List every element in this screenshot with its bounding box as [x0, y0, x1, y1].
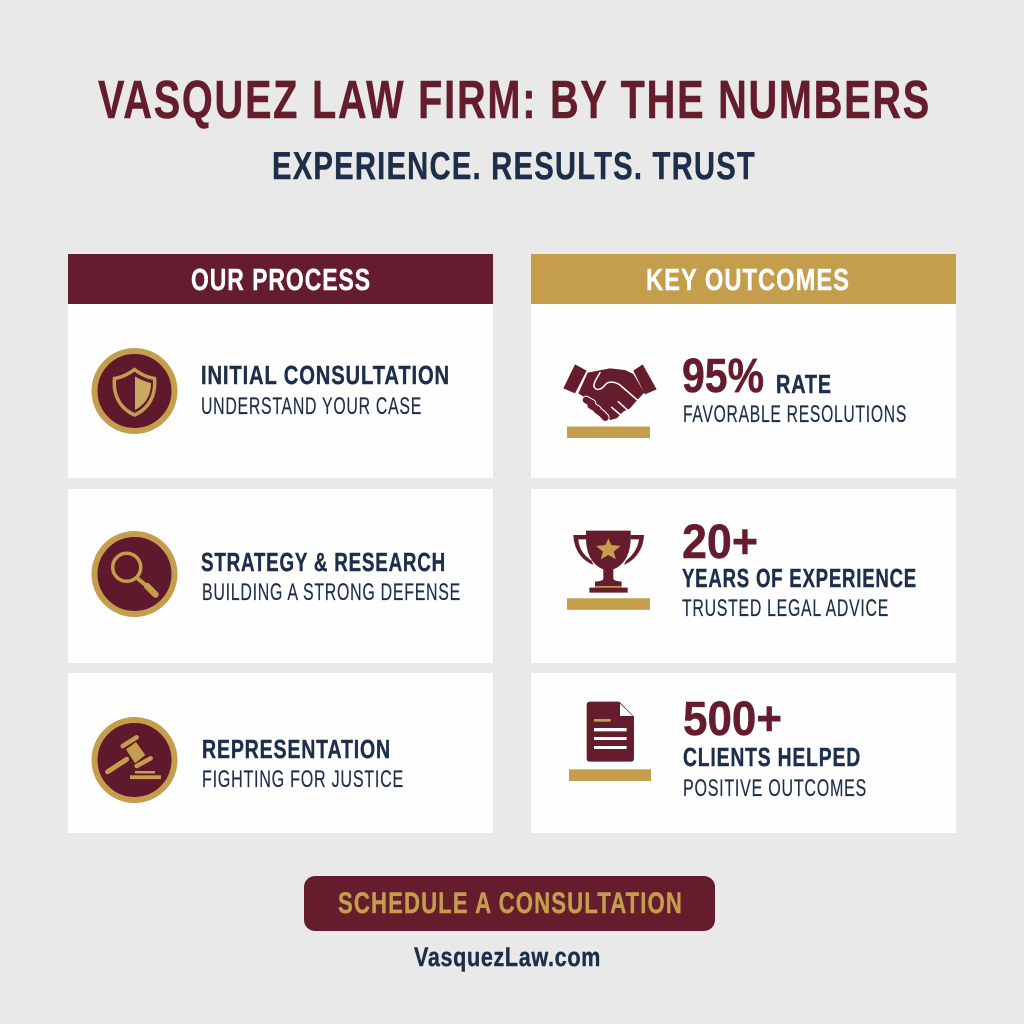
icon: document: [587, 702, 634, 762]
icon base: [567, 426, 650, 438]
header: key outcomes: KEY OUTCOMES: [646, 262, 850, 297]
text: 95% rate: RATE: [776, 369, 832, 399]
text: 95% rate: FAVORABLE RESOLUTIONS: [683, 401, 907, 428]
card: initial consultation: [68, 304, 493, 478]
icon base: [567, 598, 650, 610]
text: 95% rate: 95%: [682, 350, 764, 403]
text: initial consultation: UNDERSTAND YOUR CASE: [201, 393, 422, 420]
text: strategy and research: [201, 547, 461, 606]
text: 95% rate: [682, 350, 907, 428]
icon: magnifying glass: [94, 534, 174, 614]
panel: key outcomes: [531, 254, 956, 833]
icon: trophy: [573, 531, 644, 593]
text: 20+ years: [682, 516, 917, 622]
header: key outcomes: [531, 254, 956, 304]
text: 500+ clients: CLIENTS HELPED: [683, 742, 861, 772]
subtitle: EXPERIENCE. RESULTS. TRUST: [272, 145, 756, 188]
header: our process: [68, 254, 493, 304]
text: initial consultation: INITIAL CONSULTATION: [201, 360, 450, 390]
card: representation: [68, 673, 493, 833]
text: 20+ years: TRUSTED LEGAL ADVICE: [682, 595, 889, 622]
icon base: [569, 769, 651, 781]
text: 20+ years: YEARS OF EXPERIENCE: [682, 563, 917, 593]
card: clients helped: [531, 673, 956, 833]
text: representation: [202, 734, 404, 793]
text: 500+ clients: [683, 693, 867, 802]
icon: handshake: [563, 364, 657, 420]
text: 500+ clients: POSITIVE OUTCOMES: [683, 775, 867, 802]
icon: gavel: [94, 720, 174, 800]
icon: shield: [94, 351, 174, 431]
button: schedule a consultation: SCHEDULE A CONSULTATION: [338, 887, 683, 920]
text: strategy and research: BUILDING A STRONG DEFENSE: [202, 579, 461, 606]
text: strategy and research: STRATEGY & RESEARCH: [201, 547, 446, 577]
text: 20+ years: 20+: [682, 516, 758, 569]
card: favorable resolutions: [531, 304, 956, 478]
website url: VasquezLaw.com: [414, 942, 601, 972]
text: representation: REPRESENTATION: [202, 734, 391, 764]
panel: our process: [68, 254, 493, 833]
text: representation: FIGHTING FOR JUSTICE: [202, 766, 404, 793]
card: strategy and research: [68, 489, 493, 663]
card: years of experience: [531, 489, 956, 663]
text: initial consultation: [201, 360, 450, 420]
button: schedule a consultation: [304, 876, 715, 931]
text: 500+ clients: 500+: [683, 693, 782, 746]
header: our process: OUR PROCESS: [191, 262, 371, 297]
